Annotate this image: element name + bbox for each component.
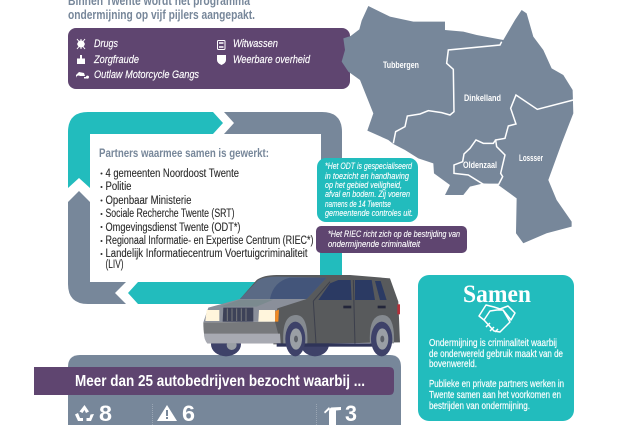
callout: ODT: *Het ODT is gespecialiseerd [325,161,413,172]
callout: ODT: op het gebied veiligheid, [325,180,402,191]
Samen body text [429,337,564,412]
Samen body text: Twente samen aan het voorkomen en [429,389,561,401]
partner list text: 4 gemeenten Noordoost Twente [106,168,239,180]
stat: warning 6 [157,401,195,425]
Samen body text: bovenwereld. [429,358,477,370]
icon: care fraud [77,55,85,64]
partner list text: Sociale Recherche Twente (SRT) [106,208,235,220]
partner bullets [100,172,102,255]
Samen body text: Ondermijning is criminaliteit waarbij [429,337,557,349]
pillar label: resilient government: Weerbare overheid [233,54,311,66]
arrow: grey bottom-left [68,191,126,304]
map label: Tubbergen: Tubbergen [383,60,419,71]
panel: five pillars [68,28,350,89]
illustration: car [203,275,400,356]
partner list text: Landelijk Informatiecentrum Voertuigcriminaliteit [106,248,308,260]
callout: RIEC: *Het RIEC richt zich op de bestrijding van [328,229,460,240]
icon: motorcycle [76,72,89,79]
stat: recycle 8 [75,401,112,425]
Samen body text: Publieke en private partners werken in [429,378,564,390]
callout: ODT: gemeentende controles uit. [325,208,413,219]
arrow frame: partners cycle [68,112,342,304]
pillar label: care fraud: Zorgfraude [93,54,139,66]
callout: ODT: in toezicht en handhaving [325,171,410,182]
heading: intro [68,0,255,22]
callout: ODT [317,158,418,222]
partner list text [106,168,314,271]
panel: Samen [418,275,574,421]
pillar label: motorcycle gangs: Outlaw Motorcycle Gangs [94,69,199,81]
stat: extinguisher 3 [324,401,357,425]
Samen body text: de onderwereld gebruik maakt van de [429,348,563,360]
callout: RIEC [316,226,467,253]
pillar label: drugs: Drugs [94,38,118,50]
arrow: teal right and bottom [128,250,342,304]
map label: Losser: Lossser [519,153,543,164]
partner list text: Omgevingsdienst Twente (ODT*) [106,222,241,234]
banner: Meer dan 25 autobedrijven bezocht waarbij ... [75,373,365,390]
heading: intro: ondermijning op vijf pijlers aangepakt. [68,8,255,22]
partner list text: Regionaal Informatie- en Expertise Centrum (RIEC*) [106,235,314,247]
callout: ODT: afval en bodem. Zij voeren [325,189,410,200]
partner list text: Politie [106,181,132,193]
icon: handshake [479,305,515,332]
Samen title: Samen [463,281,531,308]
icon: shield [217,55,226,65]
partners heading: Partners waarmee samen is gewerkt: [99,146,269,160]
map label: Oldenzaal: Oldenzaal [463,160,497,171]
partner list text: Openbaar Ministerie [106,195,192,207]
map: Twente municipalities [342,6,573,243]
arrow: grey top-right [224,112,342,165]
Samen body text: bestrijden van ondermijning. [429,400,530,412]
banner [34,367,394,395]
icon: drugs [77,39,85,49]
map label: Dinkelland: Dinkelland [464,93,501,104]
callout: RIEC: ondermijnende criminaliteit [328,239,420,250]
arrow: teal top-left [68,112,223,188]
pillar label: money laundering: Witwassen [233,38,278,50]
partner list text: (LIV) [106,259,124,271]
panel: company visits [34,355,401,425]
icon: money laundering [218,40,225,50]
panel: partners list [99,146,314,271]
callout: ODT: namens de 14 Twentse [325,199,391,210]
